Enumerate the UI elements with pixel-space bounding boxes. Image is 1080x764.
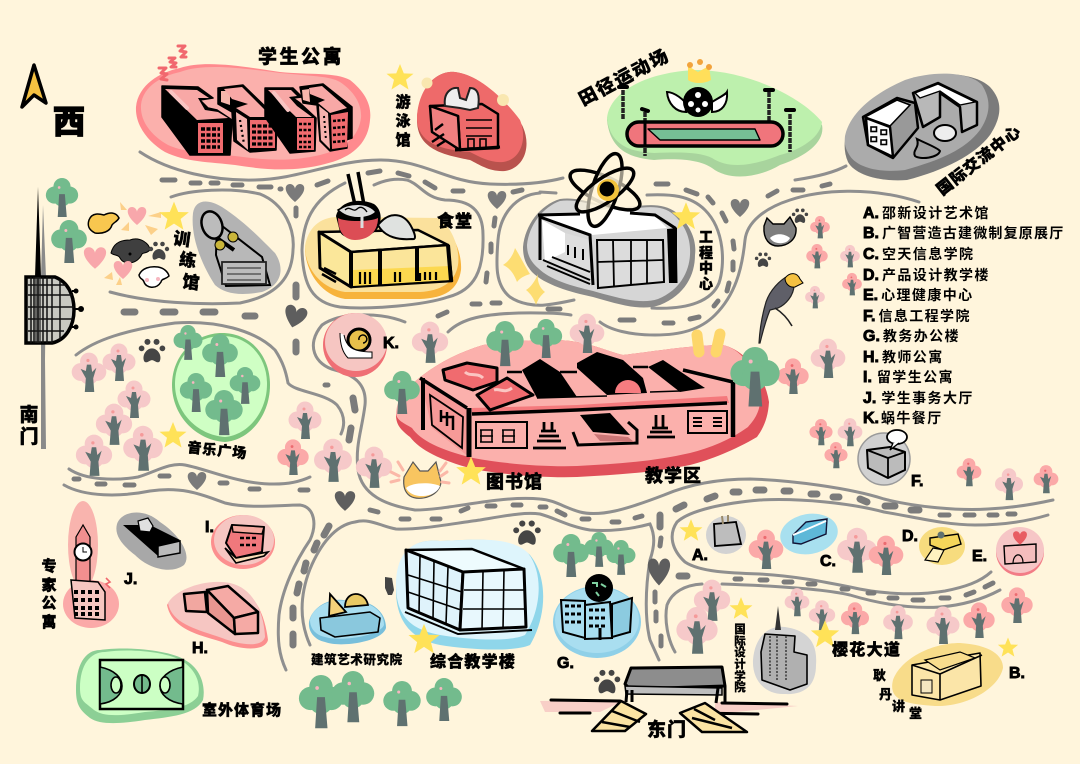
panel: canteen xyxy=(305,172,461,299)
bookmark stripes xyxy=(697,334,720,352)
icon: bird xyxy=(759,274,803,343)
label: A: A. xyxy=(692,547,708,564)
label: outdoor sports field: 室外体育场 xyxy=(202,701,282,719)
building 3 xyxy=(265,88,316,153)
walls xyxy=(421,378,425,430)
label: engineering center: 心 xyxy=(699,276,713,292)
label: international design school: 院 xyxy=(734,680,746,694)
legend: I. 留学生公寓 xyxy=(863,369,954,386)
label: architecture art institute: 建筑艺术研究院 xyxy=(311,652,403,667)
entrance xyxy=(580,413,630,435)
label: expert apartment: 公 xyxy=(41,595,57,612)
label: international design school: 设 xyxy=(734,645,746,659)
star: integrated teaching xyxy=(408,624,440,653)
label: integrated teaching building: 综合教学楼 xyxy=(430,652,516,671)
hearts and confetti xyxy=(84,202,161,285)
label: C: C. xyxy=(820,553,836,570)
heading: track field: 田径运动场 xyxy=(575,45,673,110)
building 2 xyxy=(218,85,277,152)
label: swimming hall: 馆 xyxy=(395,131,411,149)
star: sakura avenue xyxy=(811,620,839,647)
icon: paw xyxy=(149,242,169,260)
panel: G academic office xyxy=(553,574,641,658)
legend: F.信息工程学院 xyxy=(863,308,971,325)
label: I: I. xyxy=(205,519,214,536)
panel: I international student dorm xyxy=(211,515,275,569)
icon: paw xyxy=(513,520,541,545)
legend: C.空天信息学院 xyxy=(863,246,974,263)
label: engineering center: 程 xyxy=(699,245,713,261)
icon: tennis racket xyxy=(198,208,238,250)
label: international design school: 际 xyxy=(734,635,746,648)
label: D: D. xyxy=(902,528,918,545)
panel: F information engineering xyxy=(858,430,910,485)
star: training hall xyxy=(159,202,189,230)
panel: snail restaurant K xyxy=(323,313,387,377)
icon: atom xyxy=(565,150,645,230)
label: engineering center: 工 xyxy=(699,229,713,245)
label: international exchange center: 国际交流中心 xyxy=(933,121,1025,199)
legend: E.心理健康中心 xyxy=(863,287,974,304)
legend: G.教务办公楼 xyxy=(863,328,960,345)
icons: paws near cat xyxy=(755,209,808,267)
label: training hall xyxy=(172,229,201,293)
panel: J student affairs xyxy=(116,512,187,570)
trees: G top xyxy=(553,532,635,577)
legend: H.教师公寓 xyxy=(863,349,944,366)
building xyxy=(863,98,918,158)
legend: A.邵新设计艺术馆 xyxy=(863,205,990,222)
east gate xyxy=(540,667,798,732)
label: international design school: 国 xyxy=(734,623,746,636)
label: training hall: 练 xyxy=(178,249,198,271)
panel: engineering center xyxy=(503,150,700,308)
panel: integrated teaching building xyxy=(396,540,543,650)
label: Gengdan lecture hall xyxy=(873,668,922,721)
star: swimming xyxy=(386,64,414,90)
panel: swimming hall xyxy=(417,72,527,171)
sleep zzz xyxy=(159,46,186,80)
star: library xyxy=(456,457,486,485)
panel: music plaza xyxy=(172,325,270,442)
dogs xyxy=(88,213,169,287)
icon: muscle arms xyxy=(445,88,479,110)
west label: 西 xyxy=(53,104,85,140)
icon: paw xyxy=(139,339,165,362)
legend: J. 学生事务大厅 xyxy=(863,390,974,407)
star: international design xyxy=(730,597,752,619)
panel: E mental health centre xyxy=(996,527,1044,576)
trees: west blossom grove xyxy=(72,344,392,488)
panel: international exchange center xyxy=(845,74,999,180)
south gate label: 南 xyxy=(19,404,39,426)
star: music plaza xyxy=(160,422,186,448)
label: teaching zone: 教学区 xyxy=(645,465,702,486)
panel: expert apartment xyxy=(63,501,119,628)
track xyxy=(627,122,783,146)
label: G: G. xyxy=(557,655,574,672)
label: swimming hall: 泳 xyxy=(395,112,411,130)
icon: grey cat xyxy=(764,217,796,246)
legend: D.产品设计教学楼 xyxy=(863,267,990,284)
label: east gate: 东门 xyxy=(647,718,687,741)
star: B xyxy=(998,638,1018,657)
panel: track field xyxy=(607,59,822,176)
label: international design school: 学 xyxy=(734,669,746,683)
icon: books xyxy=(443,363,533,410)
label: expert apartment: 寓 xyxy=(41,613,57,631)
panel: C aerospace school xyxy=(777,509,841,559)
label: Gengdan lecture hall: 讲 xyxy=(892,699,905,714)
label: training hall: 训 xyxy=(172,229,192,250)
label: music plaza: 音乐广场 xyxy=(187,439,248,461)
label: B: B. xyxy=(1009,665,1025,682)
label: H: H. xyxy=(192,640,208,657)
trees: east blossom groups xyxy=(676,216,1058,654)
trees: south green xyxy=(299,671,462,728)
stairs xyxy=(533,422,566,448)
icon: orange cat xyxy=(391,462,449,498)
label: library: 图书馆 xyxy=(486,471,543,492)
star: A xyxy=(680,519,702,541)
label: Gengdan lecture hall: 丹 xyxy=(879,687,892,702)
panel: A art museum xyxy=(706,515,746,554)
panel: architecture art institute xyxy=(309,594,386,644)
label: K: K. xyxy=(383,335,399,352)
poles xyxy=(623,90,790,156)
panel: H faculty apartment xyxy=(167,582,268,648)
panel: library and teaching zone xyxy=(396,340,769,477)
trees: west gate xyxy=(46,178,87,263)
label: F: F. xyxy=(911,473,923,490)
label: Gengdan lecture hall: 耿 xyxy=(873,668,886,683)
building 1 xyxy=(162,86,232,155)
legend: B.广智营造古建微制复原展厅 xyxy=(863,225,1064,242)
panel: training hall xyxy=(84,201,281,294)
roads network xyxy=(64,152,1053,670)
label: E: E. xyxy=(972,548,987,565)
legend xyxy=(863,205,1064,427)
star: engineering xyxy=(672,202,700,229)
panel: D product design xyxy=(919,527,965,565)
label: sakura avenue: 樱花大道 xyxy=(832,640,901,659)
label: J: J. xyxy=(124,571,137,588)
sparkles xyxy=(503,248,545,305)
label: engineering center: 中 xyxy=(699,260,713,276)
icon: winged ball with crown xyxy=(667,59,727,117)
heading: student dormitory: 学生公寓 xyxy=(258,45,344,68)
legend: K.蜗牛餐厅 xyxy=(863,410,943,427)
icon: paw at east gate xyxy=(594,670,620,693)
building 4 xyxy=(300,84,352,151)
panel: Gengdan lecture hall xyxy=(892,643,1003,706)
south gate label: 门 xyxy=(19,425,39,448)
label: international design school: 计 xyxy=(734,657,746,671)
panel: international design school tower xyxy=(753,606,816,694)
label: expert apartment: 专 xyxy=(41,557,57,575)
label: swimming hall: 游 xyxy=(395,93,411,111)
icon: crow xyxy=(385,577,394,595)
roof lines and wall xyxy=(440,370,733,412)
south gate xyxy=(26,187,84,449)
label: Gengdan lecture hall: 堂 xyxy=(909,706,922,721)
roof peaks xyxy=(522,359,577,398)
trees: library surround xyxy=(384,314,845,414)
icon: dumpling xyxy=(378,215,415,239)
label: training hall: 馆 xyxy=(181,271,201,293)
icon: noodle bowl xyxy=(336,172,381,240)
label: expert apartment: 家 xyxy=(41,576,57,594)
label: canteen: 食堂 xyxy=(437,211,473,231)
compass arrow xyxy=(22,65,46,107)
panel: student dormitory xyxy=(136,46,370,169)
panel: outdoor sports field xyxy=(76,648,204,723)
